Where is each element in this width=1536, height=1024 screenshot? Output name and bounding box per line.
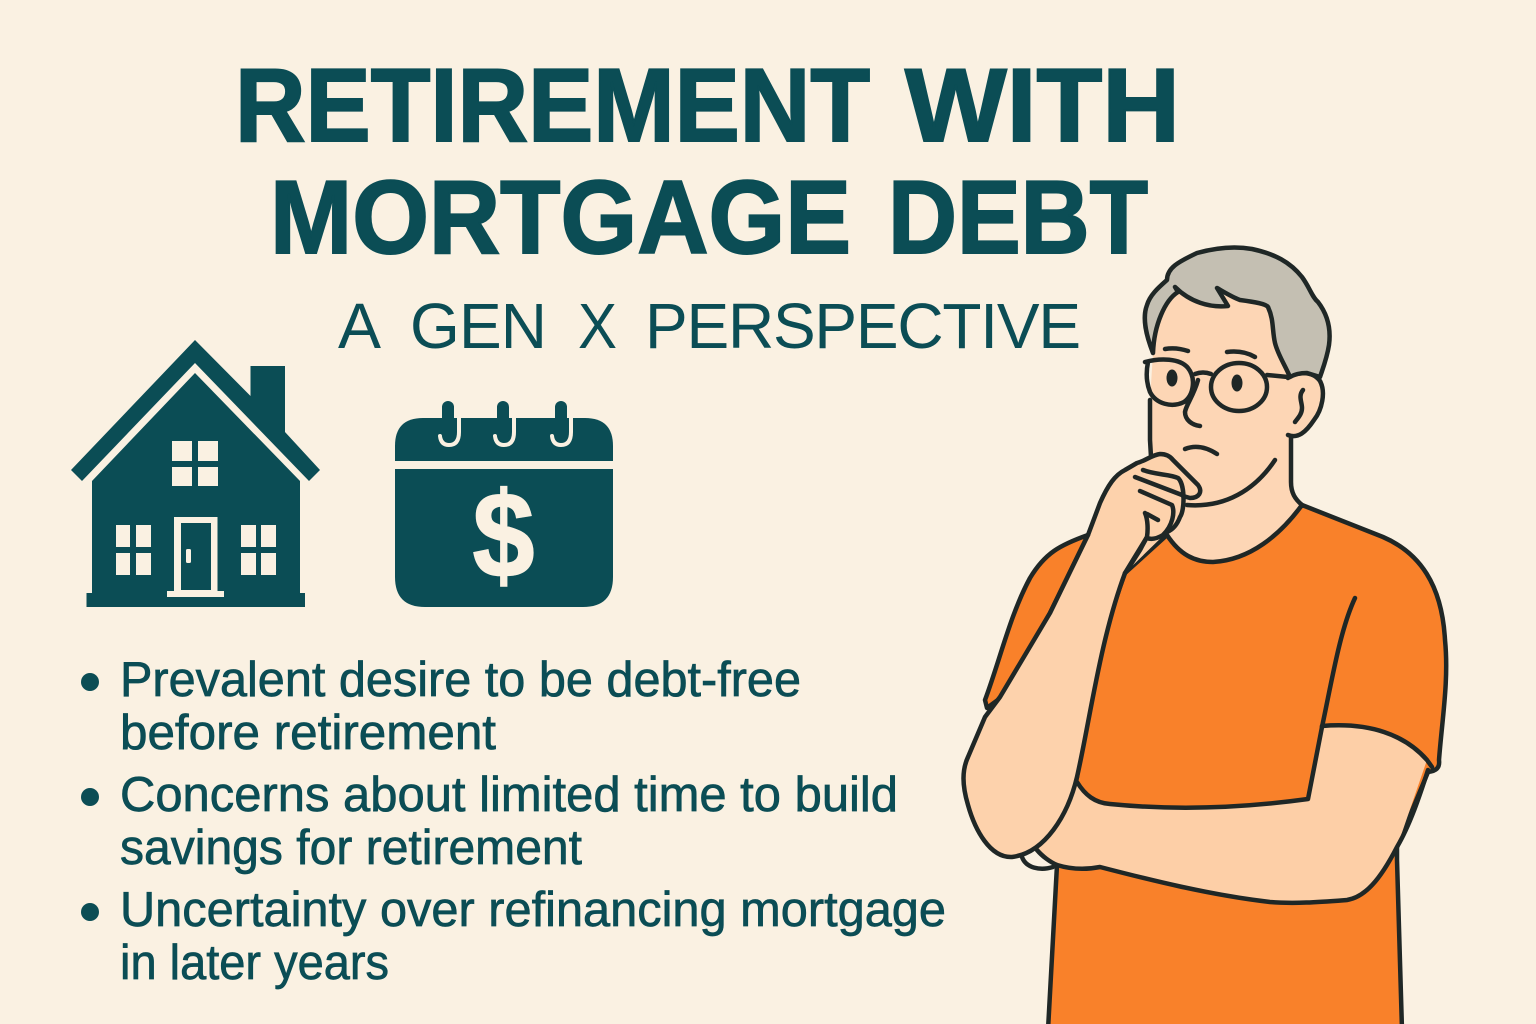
icon: calendar with dollar sign (395, 407, 613, 607)
bullet 1: before retirement (120, 706, 496, 760)
hand fingers (1126, 470, 1184, 572)
right arm (1037, 726, 1427, 903)
title: RETIREMENT (235, 48, 870, 164)
subtitle: GEN (410, 290, 547, 362)
eyebrows (1165, 348, 1188, 351)
mouth (1185, 447, 1217, 454)
neck (1150, 420, 1302, 562)
subtitle (338, 290, 1081, 362)
bullet 2: savings for retirement (120, 821, 582, 875)
left forearm outline (964, 454, 1200, 857)
bullet 1: Prevalent desire to be debt-free (120, 653, 801, 707)
bullet 1 (81, 653, 801, 760)
title: DEBT (888, 160, 1148, 276)
left sleeve (985, 535, 1088, 708)
title (235, 48, 1180, 276)
bullet 3 (81, 883, 946, 990)
shirt torso and right sleeve (1048, 505, 1446, 1024)
ear (1288, 373, 1323, 436)
bullet 3: Uncertainty over refinancing mortgage (120, 883, 946, 937)
face lines (1145, 348, 1303, 505)
nose (1185, 380, 1200, 426)
bullet 2 (81, 768, 898, 875)
bullet list (81, 653, 946, 990)
subtitle: X (578, 290, 617, 362)
right arm outline (1022, 598, 1432, 903)
bullet 3: in later years (120, 936, 389, 990)
hair (1145, 248, 1330, 377)
head (1145, 248, 1330, 505)
bullet 2: Concerns about limited time to build (120, 768, 898, 822)
title: MORTGAGE (270, 160, 851, 276)
face (1150, 290, 1292, 505)
eyes (1166, 370, 1178, 386)
subtitle: PERSPECTIVE (645, 290, 1081, 362)
left forearm (964, 454, 1200, 856)
glasses (1145, 360, 1193, 405)
dollar sign: $ (472, 467, 534, 603)
title: WITH (905, 48, 1180, 164)
illustration: thinking man (964, 248, 1446, 1024)
subtitle: A (338, 290, 381, 362)
icon: house (71, 340, 320, 607)
